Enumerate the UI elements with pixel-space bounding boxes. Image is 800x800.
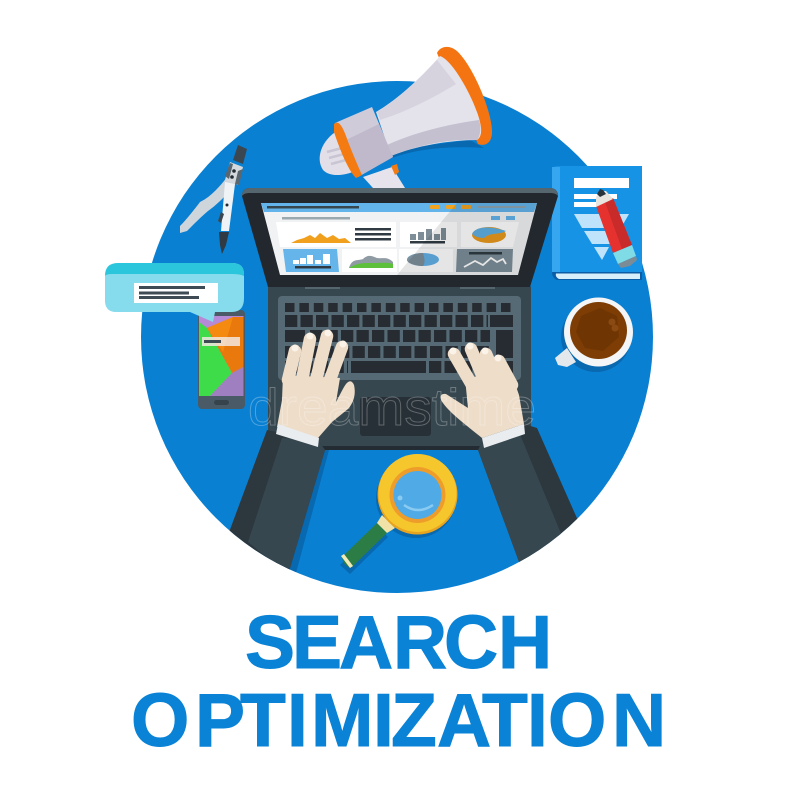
- right hand: [441, 342, 525, 448]
- screen dashboard: [261, 203, 537, 275]
- speech bubble: [105, 263, 244, 322]
- icon: megaphone: [320, 47, 492, 188]
- screen glare: [397, 203, 537, 275]
- panel: pie chart orange: [461, 222, 519, 247]
- pencil: [596, 189, 637, 268]
- icon: magnifying glass: [340, 454, 458, 574]
- icon: book with pencil: [552, 166, 642, 280]
- icon: coffee cup: [555, 298, 633, 372]
- watermark: dreamstime: [248, 379, 536, 437]
- panel: pie chart blue: [399, 249, 453, 272]
- panel: blue bar chart: [283, 249, 339, 272]
- left hand: [276, 330, 355, 447]
- panel: line chart: [456, 249, 513, 272]
- panel: bar chart: [400, 222, 457, 247]
- right sleeve: [478, 424, 580, 570]
- title: [131, 600, 666, 762]
- title: OPTIMIZATION: [131, 678, 666, 762]
- laptop: [242, 188, 558, 450]
- panel: area chart and lines: [276, 222, 396, 247]
- left sleeve: [228, 430, 329, 575]
- icon: drawing compass: [180, 145, 247, 254]
- blue circle background: [141, 81, 653, 593]
- title: SEARCH: [245, 600, 552, 684]
- laptop lid: [242, 188, 558, 287]
- touchpad: [360, 397, 431, 436]
- keys: [285, 308, 513, 367]
- panel: mountain chart: [342, 249, 397, 272]
- laptop base: [268, 285, 531, 450]
- keyboard deck: [278, 296, 521, 380]
- icon: smartphone: [198, 310, 245, 409]
- arms: [228, 424, 580, 575]
